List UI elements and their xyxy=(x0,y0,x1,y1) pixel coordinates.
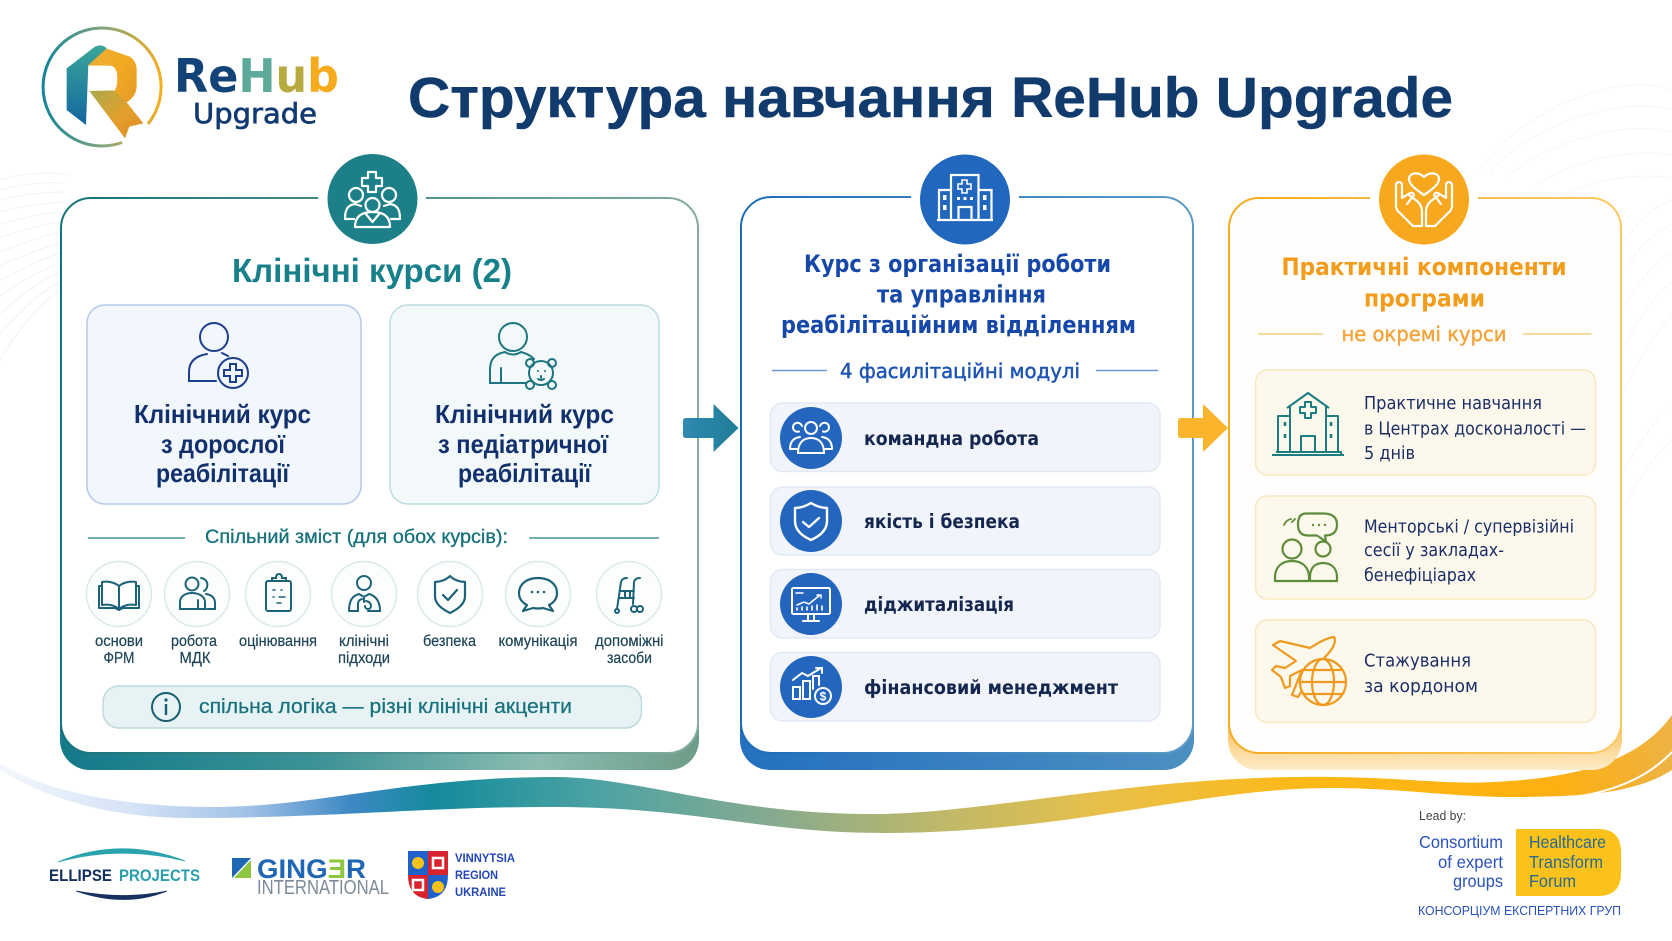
panel: practical components xyxy=(1228,145,1622,770)
panel: clinical courses xyxy=(60,145,699,770)
arrow: to practical components xyxy=(1178,404,1228,452)
module: quality and safety xyxy=(770,487,1160,555)
card: pediatric rehabilitation xyxy=(390,305,659,504)
item: оцінювання xyxy=(239,562,317,650)
module: teamwork xyxy=(770,403,1160,472)
panel subheading: 4 фасилітаційні модулі xyxy=(840,359,1080,383)
icon: medical team xyxy=(328,154,418,244)
item: клінічні підходи: підходи xyxy=(338,650,390,667)
card: adult rehabilitation xyxy=(87,305,361,504)
logo: consortium lead: Forum xyxy=(1529,871,1576,891)
icon: child with teddy bear xyxy=(490,323,556,389)
logo: consortium lead xyxy=(1418,808,1621,918)
logo: ReHub Upgrade xyxy=(43,28,339,146)
panel frame xyxy=(1228,145,1622,770)
component text: за кордоном xyxy=(1364,676,1478,697)
card text: реабілітації xyxy=(458,458,592,488)
panel heading: програми xyxy=(1364,284,1485,312)
logo: Ginger International xyxy=(232,854,389,899)
bottom decorative wave xyxy=(0,715,1672,833)
component text: Практичне навчання xyxy=(1364,393,1542,414)
logo: Vinnytsia Region Ukraine: REGION xyxy=(455,868,498,882)
logo: Vinnytsia Region Ukraine: VINNYTSIA xyxy=(455,851,515,865)
component: practical training xyxy=(1256,370,1596,475)
card text: Клінічний курс xyxy=(435,399,614,429)
icon: finance chart: $ xyxy=(820,690,827,704)
item: безпека xyxy=(418,562,482,650)
item: основи ФРМ xyxy=(86,562,152,667)
item: клінічні підходи: клінічні xyxy=(339,633,389,650)
component: internship abroad xyxy=(1256,620,1596,722)
callout: shared logic: спільна логіка — різні клінічні акценти xyxy=(199,695,572,718)
component text: 5 днів xyxy=(1364,443,1415,464)
card text: реабілітації xyxy=(156,458,290,488)
background line pattern left xyxy=(0,173,70,360)
icon: finance chart xyxy=(780,656,842,718)
logo: consortium lead: Healthcare xyxy=(1529,832,1606,852)
logo: consortium lead: Consortium xyxy=(1419,832,1503,852)
title: Структура навчання ReHub Upgrade xyxy=(408,66,1453,130)
panel frame xyxy=(740,145,1194,770)
panel heading: Клінічні курси (2) xyxy=(232,252,512,289)
logo: Ellipse Projects: PROJECTS xyxy=(119,866,200,885)
coat of arms xyxy=(408,851,448,899)
card text: з дорослої xyxy=(161,429,286,459)
component text: бенефіціарах xyxy=(1364,565,1476,586)
logo: consortium lead: Transform xyxy=(1529,852,1603,872)
icon: monitor with chart xyxy=(780,573,842,635)
panel heading: та управління xyxy=(877,280,1046,308)
logo: Ginger International: GINGƎR xyxy=(257,854,366,884)
item: основи ФРМ: ФРМ xyxy=(104,650,134,667)
panel heading xyxy=(1282,253,1566,312)
icon: team xyxy=(780,407,842,469)
item: комунікація: комунікація xyxy=(498,633,578,650)
item: клінічні підходи xyxy=(332,562,396,667)
item: допоміжні засоби: допоміжні xyxy=(595,633,664,650)
panel heading xyxy=(781,250,1136,339)
icon: hospital building xyxy=(1272,393,1344,455)
icon: hospital xyxy=(920,154,1010,244)
logo: Ellipse Projects xyxy=(49,849,200,900)
icon: mentoring people xyxy=(1275,514,1337,581)
card text: з педіатричної xyxy=(438,429,609,459)
panel heading: Курс з організації роботи xyxy=(804,250,1111,278)
component text: сесії у закладах- xyxy=(1364,540,1504,561)
logo: Vinnytsia Region Ukraine xyxy=(408,851,515,899)
logo: Ellipse Projects: ELLIPSE xyxy=(49,866,112,885)
card text: Клінічний курс xyxy=(134,399,311,429)
item: комунікація xyxy=(498,562,578,650)
panel heading: Практичні компоненти xyxy=(1282,253,1566,281)
module: digitalisation: діджиталізація xyxy=(864,593,1014,616)
module: quality and safety: якість і безпека xyxy=(864,510,1020,533)
item: безпека: безпека xyxy=(423,633,476,650)
module: teamwork: командна робота xyxy=(864,427,1039,450)
icon: hands with heart xyxy=(1379,154,1469,244)
panel frame xyxy=(60,145,699,770)
component text xyxy=(1364,650,1478,697)
component text xyxy=(1364,393,1586,464)
item: допоміжні засоби: засоби xyxy=(607,650,652,667)
card text xyxy=(435,399,614,488)
module: financial management xyxy=(770,652,1160,721)
icon: info xyxy=(152,693,180,721)
item: оцінювання: оцінювання xyxy=(239,633,317,650)
component text: Стажування xyxy=(1364,650,1471,672)
panel: management course xyxy=(740,145,1194,770)
item: основи ФРМ: основи xyxy=(95,633,143,650)
logo: consortium lead: КОНСОРЦІУМ ЕКСПЕРТНИХ ГРУП xyxy=(1418,903,1621,918)
component: mentoring xyxy=(1256,496,1596,599)
callout: shared logic xyxy=(103,686,642,728)
card text xyxy=(134,399,311,488)
item: робота МДК: МДК xyxy=(180,650,210,667)
item: допоміжні засоби xyxy=(595,562,664,667)
logo: Vinnytsia Region Ukraine: UKRAINE xyxy=(455,885,506,899)
logo: consortium lead: of expert xyxy=(1438,852,1503,872)
component text xyxy=(1364,516,1574,586)
icon: shield xyxy=(780,490,842,552)
logo: Ginger International: INTERNATIONAL xyxy=(257,877,389,899)
logo ring xyxy=(43,28,161,146)
component text: в Центрах досконалості — xyxy=(1364,418,1586,440)
logo subtitle: Upgrade xyxy=(193,97,317,130)
logo: consortium lead: groups xyxy=(1453,871,1503,891)
item: робота МДК: робота xyxy=(171,633,217,650)
panel subheading: не окремі курси xyxy=(1342,322,1506,346)
icon: adult with plus xyxy=(189,323,248,388)
module: financial management: фінансовий менеджмент xyxy=(864,676,1119,699)
logo: consortium lead: Lead by: xyxy=(1419,808,1466,823)
arrow: to management course xyxy=(683,404,738,452)
logo letter R xyxy=(67,45,143,138)
item: робота МДК xyxy=(164,562,230,667)
module: digitalisation xyxy=(770,570,1160,638)
shared content icons xyxy=(86,562,664,667)
logo wordmark: ReHub xyxy=(174,49,339,103)
background line pattern right xyxy=(1480,85,1672,505)
panel heading: реабілітаційним відділенням xyxy=(781,311,1136,339)
component text: Менторські / супервізійні xyxy=(1364,516,1574,538)
shared content heading: Спільний зміст (для обох курсів): xyxy=(205,527,508,548)
icon: plane and globe xyxy=(1272,637,1346,705)
